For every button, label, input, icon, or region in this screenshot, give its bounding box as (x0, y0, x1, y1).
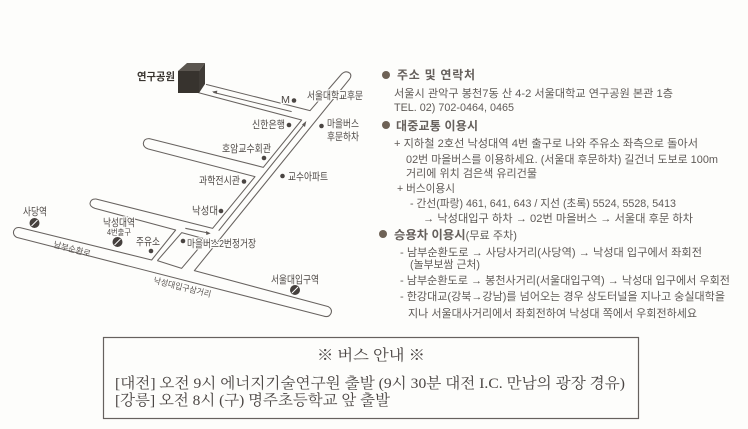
label: research park: 연구공원 (137, 70, 175, 83)
bullet (382, 121, 390, 129)
bullet (382, 71, 390, 79)
subway: Sadang station: 사당역 (23, 206, 47, 218)
landmark: science museum: 과학전시관 (199, 175, 240, 187)
landmark: gas station: 주유소 (136, 236, 160, 248)
subway directions: + 지하철 2호선 낙성대역 4번 출구로 나와 주유소 좌측으로 돌아서 (394, 136, 698, 150)
landmark: M (281, 94, 296, 106)
driving directions: - 한강대교(강북→강남)를 넘어오는 경우 상도터널을 지나고 숭실대학을 (400, 290, 725, 303)
landmark: faculty apartment: 교수아파트 (288, 171, 328, 183)
bus directions: + 버스이용시 (397, 182, 455, 195)
driving directions: (놀부보쌈 근처) (410, 258, 480, 271)
bus directions: - 간선(파랑) 461, 641, 643 / 지선 (초록) 5524, 5528, 5413 (410, 197, 676, 210)
driving directions: - 남부순환도로 → 사당사거리(사당역) → 낙성대 입구에서 좌회전 (400, 246, 702, 259)
location map (13, 63, 363, 317)
heading: public transit: 대중교통 이용시 (396, 119, 478, 133)
Daejeon departure: [대전] 오전 9시 에너지기술연구원 출발 (9시 30분 대전 I.C. 만남의 광장 경유) (115, 374, 625, 392)
telephone: TEL. 02) 702-0464, 0465 (394, 102, 514, 114)
bus directions: → 낙성대입구 하차 → 02번 마을버스 → 서울대 후문 하차 (423, 211, 693, 225)
landmark: village bus 2 stop: 마을버스2번정거장 (187, 238, 256, 250)
label: SNU back gate: 서울대학교후문 (307, 90, 363, 102)
road network (13, 72, 351, 317)
subway directions: 02번 마을버스를 이용하세요. (서울대 후문하차) 길건너 도보로 100m (406, 152, 718, 166)
road label: Nambu ring road: 남부순환로 (52, 239, 92, 259)
icon: research park building (178, 63, 205, 93)
subway directions: 거리에 위치 검은색 유리건물 (406, 167, 537, 180)
subway: Sadang station (23, 206, 47, 228)
driving directions: - 남부순환도로 → 봉천사거리(서울대입구역) → 낙성대 입구에서 우회전 (400, 274, 730, 287)
driving directions (400, 246, 730, 320)
landmark: Shinhan Bank: 신한은행 (252, 119, 285, 131)
subway: Nakseongdae station exit 4 (103, 217, 135, 247)
road label: Nakseongdae junction: 낙성대입구삼거리 (153, 275, 212, 299)
bus directions (397, 182, 693, 225)
section: public transit (382, 119, 718, 225)
landmark: Hoam faculty house: 호암교수회관 (222, 143, 271, 155)
landmark: Hoam faculty house (222, 143, 271, 160)
address text: 서울시 관악구 봉천7동 산 4-2 서울대학교 연구공원 본관 1층 (394, 87, 673, 100)
driving directions: 지나 서울대사거리에서 좌회전하여 낙성대 쪽에서 우회전하세요 (408, 306, 697, 320)
subway: Seoul Nat'l Univ. station: 서울대입구역 (271, 273, 319, 286)
section: address and contact (382, 68, 673, 114)
Gangneung departure: [강릉] 오전 8시 (구) 명주초등학교 앞 출발 (115, 391, 391, 409)
bullet (379, 230, 387, 238)
panel: bus information (104, 338, 638, 418)
subway: Nakseongdae station exit 4: 낙성대역 (103, 217, 135, 229)
section: by car (379, 228, 730, 320)
heading: address: 주소 및 연락처 (397, 68, 475, 82)
landmark: village bus back gate stop: 마을버스 (327, 118, 359, 130)
panel heading: ※ 버스 안내 ※ (317, 346, 425, 364)
subway: Seoul Nat'l Univ. station (271, 273, 319, 295)
heading: by car: 승용차 이용시(무료 주차) (394, 228, 517, 242)
landmark: gas station (136, 236, 160, 253)
subway: Nakseongdae station exit 4: 4번출구 (107, 227, 131, 237)
landmark: village bus back gate stop (319, 118, 359, 143)
landmark: village bus back gate stop: 후문하차 (327, 130, 359, 143)
landmark: M: M (281, 94, 290, 106)
subway directions (394, 136, 718, 180)
landmark: Nakseongdae: 낙성대 (192, 205, 218, 217)
